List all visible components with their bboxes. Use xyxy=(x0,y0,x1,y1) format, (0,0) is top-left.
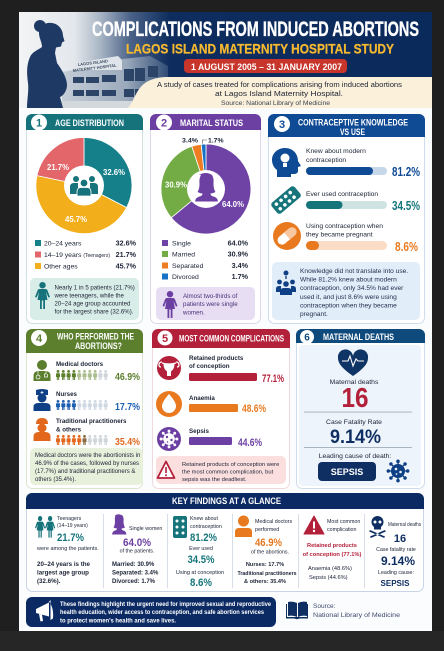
heading: maternal deaths: 6 xyxy=(304,332,310,344)
subtitle: LAGOS ISLAND MATERNITY HOSPITAL STUDY xyxy=(126,40,395,56)
callout: deadliest: the most common complication, but xyxy=(182,470,274,476)
callout: teenagers: for the largest share (32.6%). xyxy=(54,309,134,316)
row: retained products: of conception xyxy=(189,363,230,370)
stat: leading cause xyxy=(318,453,409,482)
heading: age distribution xyxy=(26,114,143,130)
finding: single women: of the patients. xyxy=(120,548,154,554)
callout: abortionists: Medical doctors were the abortionists in xyxy=(35,453,140,459)
stat: case fatality rate: Case Fatality Rate xyxy=(326,419,382,426)
legend: age: 20–24 years xyxy=(44,240,82,248)
row: anaemia xyxy=(156,391,266,417)
row: using when pregnant: 8.6% xyxy=(395,239,418,254)
row: sepsis xyxy=(157,427,262,451)
row: retained products xyxy=(157,355,284,385)
header banner xyxy=(19,12,432,108)
row: knew about contraception: 81.2% xyxy=(392,164,420,179)
callout: single women: Almost two-thirds of xyxy=(183,293,238,300)
heading: complications xyxy=(152,329,290,348)
heading: maternal deaths xyxy=(296,329,425,344)
callout: teenagers: Nearly 1 in 5 patients (21.7%) xyxy=(54,285,135,292)
row: knew about contraception: Knew about modern xyxy=(306,148,366,155)
finding: contraception: 81.2% xyxy=(190,532,217,544)
finding: teenagers: largest age group xyxy=(37,570,89,576)
finding: contraception: 8.6% xyxy=(190,577,212,589)
donut chart: age: 21.7% xyxy=(47,162,69,172)
legend: age: Other ages xyxy=(44,264,78,270)
finding: contraception: Ever used xyxy=(189,546,213,552)
row: nurses: 17.7% xyxy=(115,401,141,413)
legend: marital: Divorced xyxy=(172,274,199,281)
legend: age: 21.7% xyxy=(116,250,137,259)
hospital building illustration: LAGOS ISLAND xyxy=(78,58,108,67)
small slice labels: 1.7% xyxy=(208,138,224,144)
finding: teenagers: Teenagers xyxy=(57,516,82,522)
heading: contraceptive knowledge: 3 xyxy=(279,119,285,131)
donut chart: age: 32.6% xyxy=(103,167,125,177)
finding: maternal deaths: SEPSIS xyxy=(381,579,410,588)
finding: single women: Married: 30.9% xyxy=(112,562,155,568)
finding: maternal deaths: 16 xyxy=(394,533,406,545)
row: medical doctors: Medical doctors xyxy=(56,361,104,368)
intro text: at Lagos Island Maternity Hospital. xyxy=(215,91,343,98)
donut chart: marital: 64.0% xyxy=(222,199,244,209)
callout: deadliest xyxy=(156,456,286,484)
source: National Library of Medicine xyxy=(313,612,400,619)
intro text: Source: National Library of Medicine xyxy=(221,100,330,107)
finding: who performed: 46.9% xyxy=(255,537,282,549)
hospital building illustration: MATERNITY HOSPITAL xyxy=(73,63,117,73)
finding: who performed: of the abortions. xyxy=(251,550,289,556)
call to action text: to protect women's health and save lives. xyxy=(60,618,176,624)
icon: group of people xyxy=(70,176,98,196)
heading: maternal deaths: MATERNAL DEATHS xyxy=(323,332,394,342)
small slice labels xyxy=(182,138,224,144)
finding: who performed: Medical doctors xyxy=(255,519,292,525)
finding: complications: Sepsis (44.6%) xyxy=(309,575,348,581)
finding: who performed xyxy=(235,516,296,585)
call to action text xyxy=(60,601,272,624)
callout: deadliest: Retained products of conception were xyxy=(182,462,279,468)
finding: contraception: Knew about xyxy=(190,516,219,522)
row: using when pregnant: Using contraception when xyxy=(306,223,383,230)
source xyxy=(286,602,400,619)
call to action banner xyxy=(26,597,276,627)
finding: teenagers xyxy=(35,516,99,585)
legend: marital: Separated xyxy=(172,263,204,270)
donut chart: age: 45.7% xyxy=(65,214,87,224)
finding: teenagers: (32.6%). xyxy=(37,578,61,585)
callout: teenagers: 20–24 age group accounted xyxy=(54,301,130,308)
donut chart: age xyxy=(36,137,132,234)
callout: knowledge vs use: pregnant. xyxy=(300,311,328,318)
row: sepsis: Sepsis xyxy=(189,428,210,435)
row: ever used contraception: 34.5% xyxy=(392,198,420,213)
legend: marital: 64.0% xyxy=(228,238,249,248)
finding: who performed: & others: 35.4% xyxy=(244,579,286,585)
finding: who performed: performed xyxy=(255,527,279,533)
legend: marital: Married xyxy=(172,252,195,258)
icon: book xyxy=(286,602,308,619)
row: traditional practitioners: Traditional practitioners xyxy=(56,418,127,425)
row: traditional practitioners: 35.4% xyxy=(115,436,141,448)
row: traditional practitioners: & others xyxy=(56,426,82,434)
row: nurses xyxy=(34,389,141,413)
icon: megaphone xyxy=(36,600,53,622)
finding: contraception: contraception xyxy=(190,524,222,530)
row: anaemia: 48.6% xyxy=(242,403,266,415)
intro text: A study of cases treated for complications arising from induced abortions xyxy=(157,82,403,89)
donut chart: marital xyxy=(161,144,251,234)
heading: marital status: MARITAL STATUS xyxy=(180,118,243,128)
callout: abortionists: 46.9% of the cases, followed by nurses xyxy=(35,461,139,467)
callout: teenagers xyxy=(30,278,139,320)
callout: single women xyxy=(156,287,255,320)
row: nurses: Nurses xyxy=(56,391,78,398)
pregnant woman silhouette xyxy=(27,20,67,108)
panel: age distribution xyxy=(26,114,143,324)
row: knew about contraception: contraception xyxy=(306,157,346,164)
row: knew about contraception xyxy=(272,148,420,179)
call to action text: These findings highlight the urgent need for improved sexual and reproductive xyxy=(60,601,272,608)
row: retained products: 77.1% xyxy=(262,373,284,385)
row: anaemia: Anaemia xyxy=(189,395,215,402)
callout: single women: women. xyxy=(182,310,205,316)
heading: contraceptive knowledge: VS USE xyxy=(340,127,365,137)
source: Source: xyxy=(313,603,336,610)
stat: case fatality rate xyxy=(326,419,382,448)
finding: single women: Divorced: 1.7% xyxy=(112,579,156,585)
callout: knowledge vs use xyxy=(272,262,420,320)
callout: abortionists: others (35.4%). xyxy=(35,477,76,483)
callout: knowledge vs use: Knowledge did not translate into use. xyxy=(300,268,408,275)
cream intro band xyxy=(128,77,432,108)
finding: maternal deaths: 9.14% xyxy=(381,554,415,568)
row: sepsis: 44.6% xyxy=(238,437,262,449)
small slice labels: 3.4% xyxy=(182,138,198,144)
panel: maternal deaths xyxy=(296,329,425,488)
finding: complications: complication xyxy=(327,527,356,533)
stat: leading cause: SEPSIS xyxy=(331,467,363,477)
row: traditional practitioners xyxy=(34,418,141,448)
row: using when pregnant: they became pregnant xyxy=(306,232,373,238)
heading: who performed: WHO PERFORMED THE xyxy=(57,332,134,342)
icon: woman bust xyxy=(195,173,218,202)
heading: key findings xyxy=(26,493,424,509)
callout: single women: patients were single xyxy=(183,301,238,308)
finding: complications: of conception (77.1%) xyxy=(303,552,361,558)
finding: single women: 64.0% xyxy=(123,537,151,549)
callout: knowledge vs use: contraception, only 34.5% had ever xyxy=(300,285,404,292)
finding: single women: Single women xyxy=(129,526,162,532)
finding: maternal deaths: Leading cause: xyxy=(378,570,414,576)
heading: complications: 5 xyxy=(162,333,168,345)
row: medical doctors: 46.9% xyxy=(115,371,141,383)
panel: most common complications xyxy=(152,329,290,488)
heading: who performed xyxy=(26,329,143,353)
finding: maternal deaths: Case fatality rate xyxy=(376,547,416,553)
call to action text: health education, wider access to contraception, and safe abortion services xyxy=(60,609,265,616)
row: ever used contraception: Ever used contraception xyxy=(306,191,378,198)
legend: age: 14–19 years (Teenagers) xyxy=(44,252,110,259)
heading: who performed: 4 xyxy=(36,333,43,345)
donut chart: marital: 30.9% xyxy=(165,180,187,190)
finding: maternal deaths: Maternal deaths xyxy=(388,522,421,528)
panel: key findings xyxy=(26,493,424,592)
callout: knowledge vs use: used it, and just 8.6% were using xyxy=(300,294,397,301)
finding: single women xyxy=(112,514,162,585)
panel: contraceptive knowledge vs use xyxy=(268,114,425,324)
intro text xyxy=(157,82,403,107)
row: medical doctors xyxy=(34,360,141,383)
callout: abortionists: (17.7%) and traditional practitioners & xyxy=(35,469,135,475)
heading: key findings: KEY FINDINGS AT A GLANCE xyxy=(172,496,281,506)
legend: marital xyxy=(162,238,249,281)
finding: contraception xyxy=(173,516,224,589)
row: using when pregnant xyxy=(273,222,418,254)
finding: maternal deaths xyxy=(369,516,421,588)
heading: complications: MOST COMMON COMPLICATIONS xyxy=(179,334,284,344)
legend: marital: 30.9% xyxy=(228,250,249,258)
heading: marital status: 2 xyxy=(161,118,167,130)
row: ever used contraception xyxy=(270,185,420,215)
hospital building illustration xyxy=(60,56,168,108)
callout: deadliest: sepsis was the deadliest. xyxy=(182,477,247,483)
date pill: 1 AUGUST 2005 – 31 JANUARY 2007 xyxy=(191,62,342,73)
callout: knowledge vs use: contraception when they became xyxy=(300,302,397,310)
panel: who performed the abortions xyxy=(26,329,143,488)
heading: age distribution: AGE DISTRIBUTION xyxy=(55,118,124,128)
callout: knowledge vs use: While 81.2% knew about modern xyxy=(300,277,397,284)
heading: contraceptive knowledge: CONTRACEPTIVE KNOWLEDGE xyxy=(298,118,408,128)
finding: contraception: Using at conception xyxy=(176,570,224,576)
legend: marital: Single xyxy=(172,240,191,248)
finding: who performed: Nurses: 17.7% xyxy=(246,562,284,568)
heading: age distribution: 1 xyxy=(36,118,42,130)
finding: single women: Separated: 3.4% xyxy=(112,570,159,576)
stat: maternal deaths: Maternal deaths xyxy=(330,379,379,386)
icon: heartbeat xyxy=(338,349,368,376)
heading: who performed: ABORTIONS? xyxy=(75,341,122,351)
legend: marital: 1.7% xyxy=(232,272,249,281)
finding: teenagers: (14–19 years) xyxy=(57,523,88,529)
finding: contraception: 34.5% xyxy=(188,554,215,566)
stat: leading cause: Leading cause of death: xyxy=(319,453,391,460)
stat: case fatality rate: 9.14% xyxy=(330,426,381,448)
finding: complications: Retained products xyxy=(307,543,357,549)
finding: teenagers: 20–24 years is the xyxy=(37,561,91,568)
heading: marital status xyxy=(150,114,261,130)
heading: contraceptive knowledge xyxy=(268,114,425,137)
legend: marital: 3.4% xyxy=(232,261,249,270)
finding: who performed: Traditional practitioners xyxy=(238,571,296,577)
finding: complications xyxy=(303,516,361,581)
callout: teenagers: were teenagers, while the xyxy=(54,293,125,300)
panel: marital status xyxy=(150,114,261,324)
callout: abortionists xyxy=(30,448,143,485)
finding: teenagers: were among the patients. xyxy=(36,546,99,552)
legend: age: 45.7% xyxy=(116,262,137,270)
legend: age xyxy=(35,238,137,270)
row: retained products: Retained products xyxy=(189,355,244,362)
finding: teenagers: 21.7% xyxy=(57,532,84,544)
stat: maternal deaths: 16 xyxy=(342,382,368,413)
legend: age: 32.6% xyxy=(116,238,137,248)
finding: complications: Most common xyxy=(327,519,360,525)
finding: complications: Anaemia (48.6%) xyxy=(308,566,352,572)
stat: maternal deaths xyxy=(330,379,379,413)
